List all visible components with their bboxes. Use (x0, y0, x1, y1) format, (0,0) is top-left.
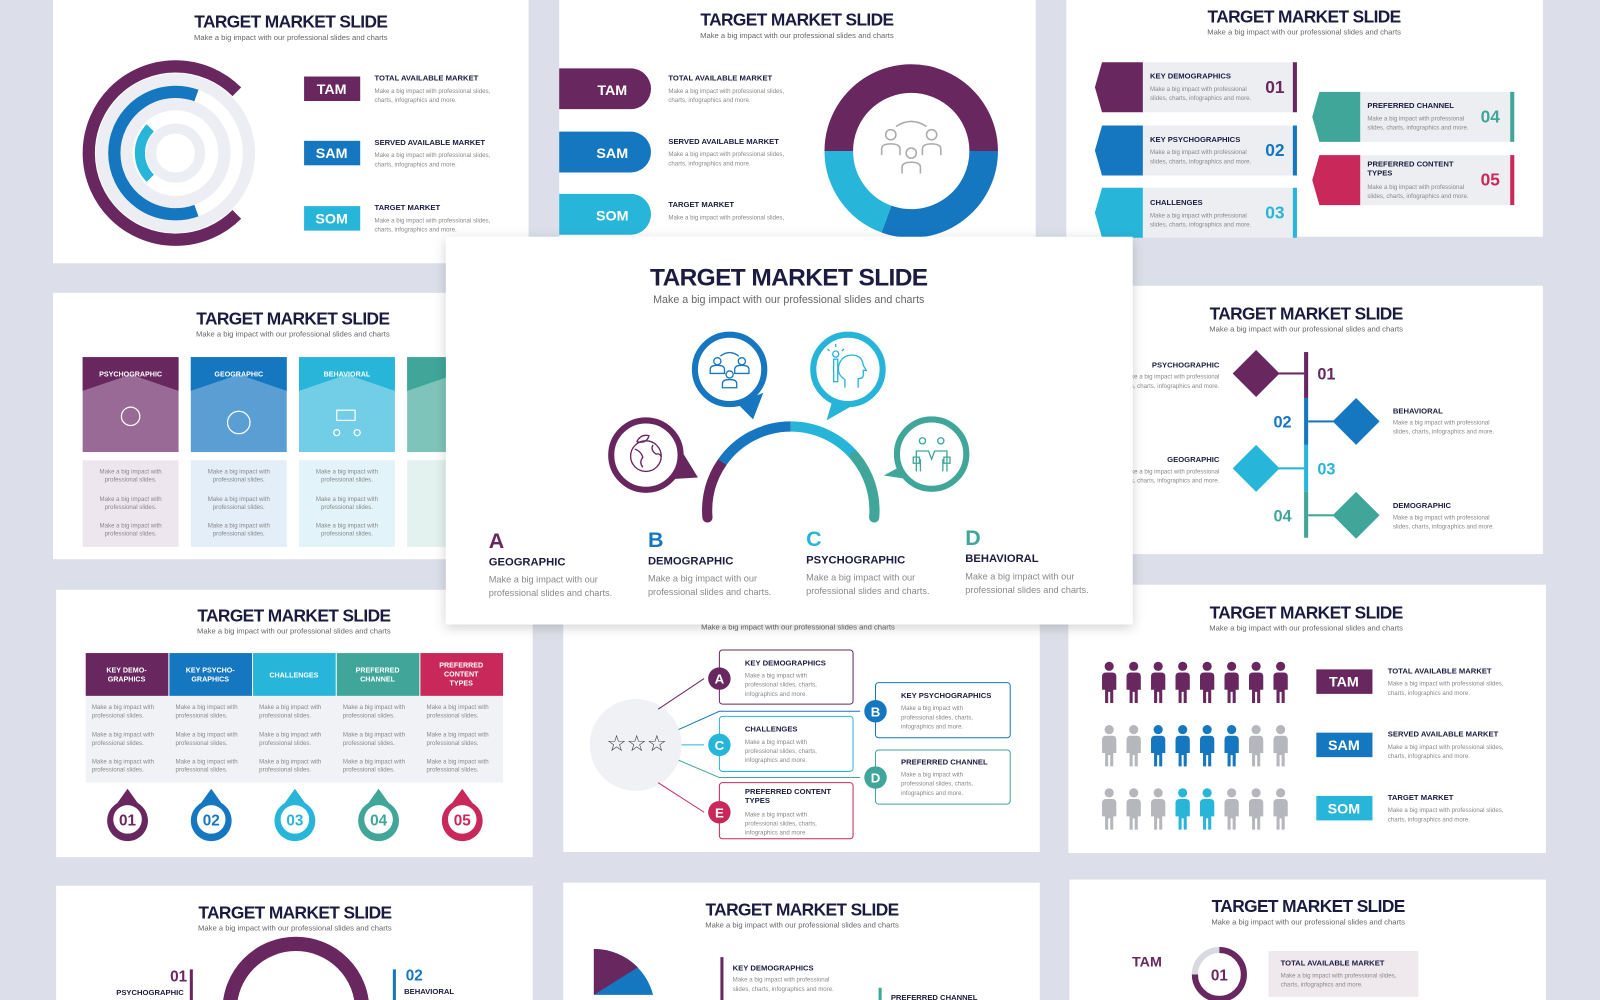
pills: Make a big impact with professional slides, (668, 88, 784, 95)
table: KEY DEMO- (106, 666, 147, 674)
items 01-03: Make a big impact with professional (1150, 212, 1247, 219)
timeline: 04 (1273, 507, 1292, 525)
pills: charts, infographics and more. (668, 160, 751, 167)
table: Make a big impact with (92, 732, 154, 739)
columns: professional slides. (105, 504, 157, 511)
segment C text: Make a big impact with our (806, 573, 915, 583)
table: Make a big impact with (176, 758, 238, 765)
card 12: bottom right (1069, 880, 1546, 1000)
card 11: bottom middle: Make a big impact with our professional slides and charts (705, 921, 899, 930)
labels: TARGET MARKET (1388, 793, 1454, 802)
columns (83, 357, 503, 547)
columns: Make a big impact with (208, 468, 270, 475)
boxes A-E: Make a big impact with (745, 739, 807, 746)
segment A text: A (489, 529, 504, 553)
segment C text: PSYCHOGRAPHIC (806, 554, 905, 566)
table: Make a big impact with (343, 704, 405, 711)
boxes A-E: A (715, 672, 725, 687)
timeline: slides, charts, infographics and more. (1393, 429, 1494, 436)
donut chart (839, 79, 984, 223)
number pins: 01 (119, 813, 137, 830)
boxes A-E: B (871, 704, 880, 719)
TAM SAM SOM labels: charts, infographics and more. (374, 97, 457, 104)
items 01-03: slides, charts, infographics and more. (1150, 222, 1251, 229)
card 10: bottom left: TARGET MARKET SLIDE (198, 902, 391, 922)
TAM SAM SOM labels: charts, infographics and more. (374, 161, 457, 168)
bubble D: behavioral people (884, 419, 966, 489)
card 8: lettered boxes: Make a big impact with our professional slides and charts (701, 623, 895, 632)
columns: professional slides. (321, 504, 373, 511)
boxes A-E: Make a big impact with (901, 705, 963, 712)
items 01-03: 03 (1265, 202, 1285, 222)
segment A text (489, 529, 612, 598)
connector lines (658, 679, 860, 812)
center subtitle: Make a big impact with our professional slides and charts (653, 294, 924, 306)
items 04-05: 05 (1481, 170, 1500, 190)
timeline: slides, charts, infographics and more. (1118, 478, 1220, 485)
segment B text (648, 528, 771, 597)
columns: professional slides. (105, 531, 157, 538)
boxes A-E: Make a big impact with (901, 772, 963, 779)
pills: TOTAL AVAILABLE MARKET (668, 74, 773, 83)
labels: Make a big impact with professional slides, (1388, 744, 1504, 751)
boxes A-E: infographics and more. (901, 724, 963, 731)
table: Make a big impact with (343, 758, 405, 765)
boxes A-E: infographics and more. (901, 790, 963, 797)
table: PREFERRED (356, 666, 400, 674)
card 11: bottom middle (563, 883, 1040, 1000)
card 11: bottom middle: slides, charts, infographics and more. (733, 986, 834, 993)
segment A text: Make a big impact with our (489, 575, 598, 585)
card 3 title: TARGET MARKET SLIDE (1208, 6, 1401, 26)
columns: Make a big impact with (100, 496, 162, 503)
card 10: bottom left: PSYCHOGRAPHIC (116, 988, 184, 997)
table (86, 653, 503, 783)
items 04-05: slides, charts, infographics and more. (1367, 125, 1469, 132)
table: professional slides. (259, 766, 311, 773)
card 3: numbered items (1066, 0, 1543, 238)
people rows (1102, 662, 1288, 830)
table: professional slides. (92, 766, 144, 773)
TAM SAM SOM labels: SAM (316, 146, 347, 162)
table: Make a big impact with (427, 704, 489, 711)
items 04-05: PREFERRED CHANNEL (1367, 101, 1454, 110)
card 2: donut (559, 0, 1036, 240)
card 2 title: TARGET MARKET SLIDE (700, 10, 894, 30)
boxes A-E: Make a big impact with (745, 811, 807, 818)
boxes A-E: infographics and more. (745, 757, 807, 764)
columns: Make a big impact with (100, 523, 162, 530)
items 04-05: Make a big impact with professional (1367, 115, 1464, 122)
card 1: TAM SAM SOM arcs (53, 0, 529, 263)
card 2: donut: Make a big impact with our professional slides and charts (700, 31, 894, 40)
boxes A-E: professional slides, charts, (901, 714, 973, 721)
timeline: 03 (1317, 460, 1336, 478)
card 10: bottom left: 01 (170, 969, 188, 986)
labels: SERVED AVAILABLE MARKET (1388, 730, 1499, 739)
table: professional slides. (427, 766, 479, 773)
table: CHALLENGES (269, 672, 319, 680)
bubble A: geographic globe (611, 420, 698, 490)
pills: SOM (596, 208, 628, 224)
timeline: GEOGRAPHIC (1167, 455, 1220, 464)
table: Make a big impact with (343, 732, 405, 739)
pills: SAM (596, 146, 628, 162)
items 01-03: CHALLENGES (1150, 198, 1203, 207)
labels: Make a big impact with professional slides, (1388, 681, 1504, 688)
pills (559, 68, 784, 235)
TAM SAM SOM labels: TARGET MARKET (374, 203, 440, 212)
table: professional slides. (176, 740, 228, 747)
boxes A-E: infographics and more. (745, 691, 807, 698)
segment B text: DEMOGRAPHIC (648, 555, 733, 567)
timeline: Make a big impact with professional (1393, 514, 1490, 521)
items 01-03 (1095, 62, 1297, 238)
columns: professional slides. (321, 477, 373, 484)
card 12: bottom right: Make a big impact with our professional slides and charts (1211, 917, 1405, 926)
table: Make a big impact with (259, 704, 321, 711)
TAM SAM SOM labels: Make a big impact with professional slides, (374, 217, 491, 224)
items 01-03: KEY PSYCHOGRAPHICS (1150, 135, 1240, 144)
card 6: diamond timeline: Make a big impact with our professional slides and charts (1209, 325, 1403, 334)
boxes A-E: infographics and more. (745, 830, 807, 837)
number pins (107, 789, 483, 841)
segment B text: Make a big impact with our (648, 574, 757, 584)
stars circle icon (590, 699, 682, 791)
columns: Make a big impact with (100, 468, 162, 475)
number pins: 04 (370, 813, 388, 830)
pills: Make a big impact with professional slides, (668, 151, 784, 158)
timeline: PSYCHOGRAPHIC (1152, 360, 1220, 369)
boxes A-E: PREFERRED CONTENT (745, 787, 831, 796)
columns: BEHAVIORAL (324, 371, 371, 379)
timeline: BEHAVIORAL (1393, 406, 1443, 415)
columns: professional slides. (105, 477, 157, 484)
timeline: slides, charts, infographics and more. (1118, 383, 1220, 390)
TAM SAM SOM labels: Make a big impact with professional slides, (374, 88, 491, 95)
table: Make a big impact with (176, 704, 238, 711)
columns: professional slides. (213, 504, 265, 511)
table: GRAPHICS (108, 676, 146, 684)
columns: professional slides. (213, 477, 265, 484)
columns: Make a big impact with (208, 496, 270, 503)
boxes A-E: D (871, 771, 881, 786)
boxes A-E: professional slides, charts, (745, 748, 817, 755)
items 01-03: slides, charts, infographics and more. (1150, 95, 1251, 102)
items 01-03: 02 (1265, 140, 1285, 160)
card 10: bottom left: 02 (406, 968, 423, 985)
TAM SAM SOM labels: SERVED AVAILABLE MARKET (374, 138, 485, 147)
timeline: DEMOGRAPHIC (1393, 501, 1451, 510)
boxes A-E: KEY DEMOGRAPHICS (745, 658, 826, 667)
labels (1316, 666, 1504, 823)
card 12: bottom right: charts, infographics and more. (1281, 982, 1363, 989)
labels: TAM (1329, 675, 1359, 691)
segment D text (965, 526, 1089, 595)
table: professional slides. (176, 766, 228, 773)
columns: Make a big impact with (316, 523, 378, 530)
timeline: Make a big impact with professional (1123, 468, 1219, 475)
segment C text (806, 527, 930, 596)
stars circle icon: ☆☆☆ (607, 731, 667, 756)
timeline: Make a big impact with professional (1393, 419, 1490, 426)
table: professional slides. (343, 712, 395, 719)
segment D text: professional slides and charts. (965, 585, 1089, 595)
TAM SAM SOM labels: SOM (315, 211, 348, 227)
boxes A-E: professional slides, charts, (745, 682, 817, 689)
columns: GEOGRAPHIC (214, 371, 263, 379)
card 12: bottom right: TAM (1132, 954, 1162, 970)
items 01-03: 01 (1265, 77, 1285, 97)
card 12: bottom right: Make a big impact with professional slides, (1281, 973, 1397, 980)
timeline: slides, charts, infographics and more. (1393, 524, 1494, 531)
labels: charts, infographics and more. (1388, 816, 1470, 823)
table: PREFERRED (439, 661, 483, 669)
table: professional slides. (92, 740, 144, 747)
table: Make a big impact with (92, 704, 154, 711)
bubble B: demographic group (695, 335, 764, 419)
table: professional slides. (176, 712, 228, 719)
card 10: bottom left: Make a big impact with our professional slides and charts (198, 924, 392, 933)
boxes A-E: KEY PSYCHOGRAPHICS (901, 691, 991, 700)
card 12: bottom right: TARGET MARKET SLIDE (1212, 896, 1405, 916)
table: professional slides. (343, 740, 395, 747)
table: Make a big impact with (92, 758, 154, 765)
items 04-05: TYPES (1367, 169, 1392, 178)
table: Make a big impact with (427, 732, 489, 739)
boxes A-E: TYPES (745, 796, 770, 805)
timeline: Make a big impact with professional (1123, 374, 1219, 381)
columns: professional slides. (321, 531, 373, 538)
items 04-05: PREFERRED CONTENT (1367, 159, 1454, 168)
card 11: bottom middle: KEY DEMOGRAPHICS (733, 963, 814, 972)
table: professional slides. (343, 766, 395, 773)
card 4: segment columns (53, 293, 503, 559)
labels: TOTAL AVAILABLE MARKET (1388, 666, 1492, 675)
card 1 title: TARGET MARKET SLIDE (194, 12, 387, 32)
TAM SAM SOM labels (304, 74, 491, 234)
TAM SAM SOM labels: charts, infographics and more. (374, 227, 457, 234)
labels: charts, infographics and more. (1388, 753, 1470, 760)
table: professional slides. (259, 712, 311, 719)
card 1: TAM SAM SOM arcs: Make a big impact with our professional slides and charts (194, 33, 388, 42)
concentric arc chart (89, 66, 249, 240)
columns: Make a big impact with (316, 496, 378, 503)
TAM SAM SOM labels: Make a big impact with professional slides, (374, 152, 491, 159)
center title: TARGET MARKET SLIDE (650, 265, 928, 292)
table: Make a big impact with (176, 732, 238, 739)
segment B text: professional slides and charts. (648, 587, 771, 597)
columns: professional slides. (213, 531, 265, 538)
timeline (1118, 350, 1494, 539)
items 04-05 (1312, 92, 1514, 205)
table: CHANNEL (360, 676, 396, 684)
segment D text: BEHAVIORAL (965, 553, 1039, 565)
card 7: table with pins (56, 590, 533, 857)
table: GRAPHICS (191, 676, 229, 684)
semicircle arc (707, 427, 874, 517)
card 10: bottom left (56, 886, 533, 1000)
boxes A-E: PREFERRED CHANNEL (901, 757, 988, 766)
card 9: people pictogram: Make a big impact with our professional slides and charts (1209, 624, 1403, 633)
card 6 title: TARGET MARKET SLIDE (1210, 303, 1403, 323)
timeline: 01 (1317, 366, 1336, 384)
table: CONTENT (444, 671, 479, 679)
labels: SAM (1328, 738, 1360, 754)
card 4: segment columns: Make a big impact with our professional slides and charts (196, 330, 390, 339)
labels: Make a big impact with professional slides, (1388, 807, 1504, 814)
segment A text: professional slides and charts. (489, 588, 612, 598)
boxes A-E: C (715, 738, 725, 753)
items 04-05: slides, charts, infographics and more. (1367, 193, 1469, 200)
table: Make a big impact with (427, 758, 489, 765)
pills: TAM (597, 83, 627, 99)
boxes A-E: Make a big impact with (745, 673, 807, 680)
boxes A-E: professional slides, charts, (901, 781, 973, 788)
table: Make a big impact with (259, 732, 321, 739)
items 01-03: Make a big impact with professional (1150, 86, 1247, 93)
table: KEY PSYCHO- (186, 666, 235, 674)
card 12: bottom right: TOTAL AVAILABLE MARKET (1281, 958, 1385, 967)
card 7 title: TARGET MARKET SLIDE (197, 605, 390, 625)
timeline: 02 (1273, 414, 1292, 432)
segment A text: GEOGRAPHIC (489, 556, 565, 568)
labels: charts, infographics and more. (1388, 690, 1470, 697)
items 01-03: Make a big impact with professional (1150, 149, 1247, 156)
columns: Make a big impact with (316, 468, 378, 475)
items 04-05: Make a big impact with professional (1367, 184, 1464, 191)
center card: featured slide (446, 237, 1133, 624)
table: professional slides. (259, 740, 311, 747)
number pins: 03 (286, 813, 303, 830)
segment C text: C (806, 527, 822, 551)
pills: SERVED AVAILABLE MARKET (668, 137, 779, 146)
pills: TARGET MARKET (668, 200, 734, 209)
segment D text: Make a big impact with our (965, 572, 1074, 582)
card 9 title: TARGET MARKET SLIDE (1210, 602, 1403, 622)
pills: Make a big impact with professional slides, (668, 214, 784, 221)
columns: PSYCHOGRAPHIC (99, 371, 162, 379)
table: professional slides. (92, 712, 144, 719)
labels: SOM (1328, 801, 1360, 817)
card 4 title: TARGET MARKET SLIDE (196, 308, 389, 328)
card 11: bottom middle: TARGET MARKET SLIDE (705, 899, 899, 919)
boxes A-E (708, 650, 1010, 839)
table: professional slides. (427, 712, 479, 719)
card 3: numbered items: Make a big impact with our professional slides and charts (1207, 28, 1401, 37)
segment B text: B (648, 528, 663, 552)
number pins: 02 (203, 813, 220, 830)
table: TYPES (450, 680, 473, 688)
card 9: people pictogram (1068, 585, 1546, 853)
boxes A-E: CHALLENGES (745, 725, 798, 734)
pills: charts, infographics and more. (668, 97, 751, 104)
card 7: table with pins: Make a big impact with our professional slides and charts (197, 627, 391, 636)
boxes A-E: E (715, 805, 724, 820)
items 01-03: slides, charts, infographics and more. (1150, 158, 1251, 165)
card 11: bottom middle: Make a big impact with professional (733, 977, 829, 984)
items 01-03: KEY DEMOGRAPHICS (1150, 72, 1231, 81)
bubble C: psychographic head (813, 335, 883, 420)
columns: Make a big impact with (208, 523, 270, 530)
TAM SAM SOM labels: TAM (317, 82, 347, 98)
card 6: diamond timeline (1102, 286, 1543, 554)
boxes A-E: professional slides, charts, (745, 821, 817, 828)
table: Make a big impact with (259, 758, 321, 765)
segment C text: professional slides and charts. (806, 586, 930, 596)
table: professional slides. (427, 740, 479, 747)
TAM SAM SOM labels: TOTAL AVAILABLE MARKET (374, 74, 479, 83)
card 10: bottom left: BEHAVIORAL (404, 987, 454, 996)
items 04-05: 04 (1481, 106, 1500, 126)
card 12: bottom right: 01 (1211, 968, 1228, 985)
number pins: 05 (454, 813, 471, 830)
segment D text: D (965, 526, 981, 550)
card 8: lettered boxes (563, 602, 1040, 852)
